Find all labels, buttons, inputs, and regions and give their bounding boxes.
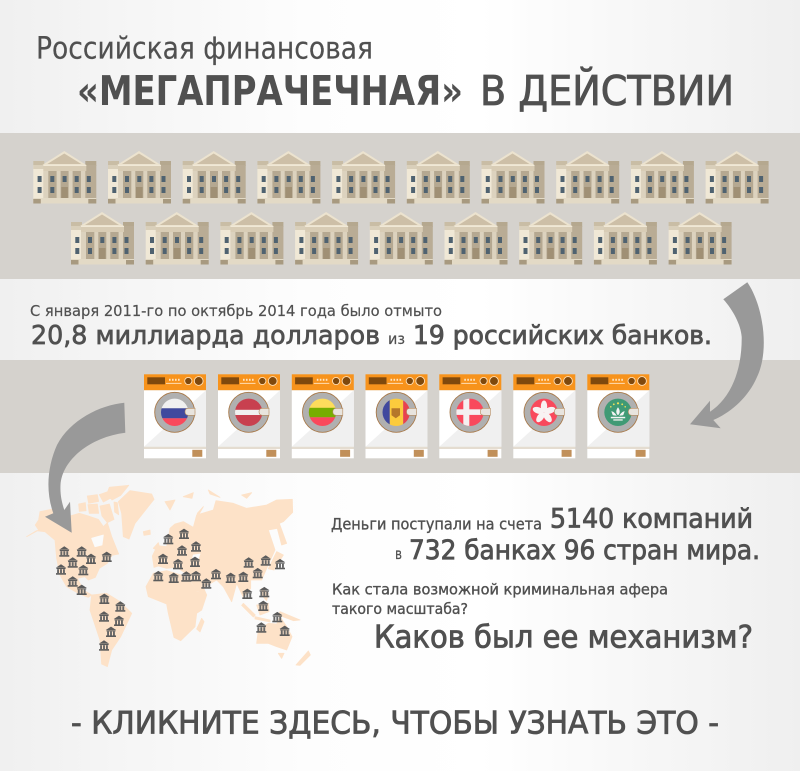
washing machine: Latvia (218, 374, 280, 458)
washing machine: Macau (587, 374, 649, 458)
icons: bottom row of banks (71, 212, 732, 264)
text: banks and countries: 732 банках 96 стран мира. (409, 535, 760, 566)
subtitle: Российская финансовая (36, 32, 373, 66)
icons: banks on map (56, 529, 290, 651)
call to action: - КЛИКНИТЕ ЗДЕСЬ, ЧТОБЫ УЗНАТЬ ЭТО - (71, 705, 719, 741)
text: companies: 5140 компаний (550, 504, 753, 535)
text: companies: Деньги поступали на счета (331, 514, 542, 533)
icons: top row of banks (33, 151, 769, 204)
washing machine: Lithuania (292, 374, 354, 458)
title: В ДЕЙСТВИИ (480, 67, 734, 115)
band: washing machines (0, 360, 800, 473)
world map (27, 485, 310, 667)
title: «МЕГАПРАЧЕЧНАЯ» (77, 67, 463, 115)
text: mechanism question: Каков был ее механизм? (374, 619, 753, 655)
text: banks and countries: в (395, 545, 402, 563)
arrow: from banks to washing machines (690, 282, 764, 428)
band: banks (0, 133, 800, 279)
washing machine: Russia (144, 374, 206, 458)
washing machine: Hong Kong (513, 374, 575, 458)
washing machine: Denmark (439, 374, 501, 458)
text: amount and banks: 20,8 миллиарда долларов (31, 321, 380, 351)
text: amount and banks (31, 321, 712, 351)
text: amount and banks: из (388, 330, 405, 348)
text: companies (331, 504, 753, 535)
washing machine: Moldova (366, 374, 428, 458)
text: question (332, 580, 668, 618)
text: period of laundering: С января 2011-го по октябрь 2014 года было отмыто (30, 302, 442, 320)
text: question: Как стала возможной криминальная афера (332, 580, 668, 598)
text: amount and banks: 19 российских банков. (413, 321, 712, 351)
arrow: from washing machines to world map (45, 403, 125, 533)
text: question: такого масштаба? (332, 600, 468, 618)
